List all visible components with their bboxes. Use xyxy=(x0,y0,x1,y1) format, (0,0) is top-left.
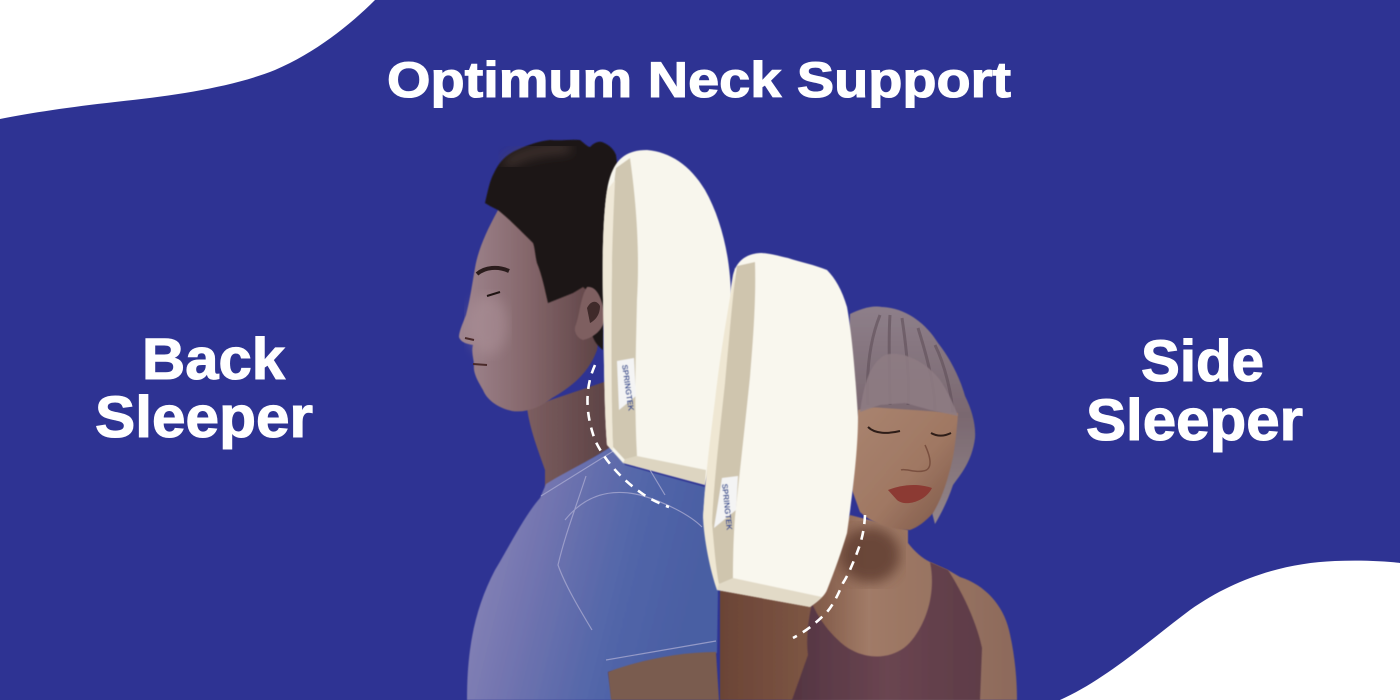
pillow front edge xyxy=(603,180,615,450)
pillow: side sleeper xyxy=(703,253,858,607)
man arm xyxy=(608,652,719,700)
man neck xyxy=(527,380,615,487)
label: side sleeper: Sleeper xyxy=(1086,388,1303,453)
pillow front edge xyxy=(703,267,735,590)
title: Optimum Neck Support xyxy=(387,52,1011,108)
white corner shape: bottom right xyxy=(1060,561,1400,700)
man eye xyxy=(487,292,500,296)
white corner shape: top left xyxy=(0,0,375,119)
label: side sleeper xyxy=(1086,329,1303,453)
woman lips xyxy=(888,485,932,503)
pillow: back sleeper xyxy=(603,150,731,485)
man hair highlight xyxy=(505,148,570,165)
pillow bottom seam xyxy=(623,456,706,485)
dashed curve: side sleeper neck xyxy=(793,515,865,638)
man face highlight xyxy=(468,295,508,355)
man nostril and lips xyxy=(465,338,487,365)
label: back sleeper: Back xyxy=(142,327,286,392)
man shirt xyxy=(467,444,718,700)
man face xyxy=(459,210,605,411)
man ear xyxy=(575,287,605,340)
pillow label: SPRINGTEK xyxy=(720,483,734,531)
label: side sleeper: Side xyxy=(1141,329,1264,394)
woman face xyxy=(852,407,958,530)
pillow label xyxy=(714,476,738,531)
pillow body xyxy=(703,253,858,607)
woman neck shadow xyxy=(840,527,900,583)
pillow side mesh xyxy=(611,158,638,460)
man hair xyxy=(485,140,618,350)
pillow side mesh xyxy=(712,262,755,584)
man figure xyxy=(459,140,719,700)
label: back sleeper: Sleeper xyxy=(95,385,313,450)
dashed curve: back sleeper neck xyxy=(587,365,669,507)
man ear shadow xyxy=(587,302,600,323)
woman fringe xyxy=(860,354,958,416)
pillow label: SPRINGTEK xyxy=(620,364,635,412)
man eyebrow xyxy=(477,268,509,274)
woman eyes xyxy=(868,427,951,436)
label: back sleeper xyxy=(95,327,313,450)
woman body skin xyxy=(720,515,1017,700)
woman figure xyxy=(720,306,1017,700)
man shirt seams xyxy=(541,450,716,660)
pillow body xyxy=(603,150,731,485)
woman hair strands xyxy=(868,315,953,415)
woman nose xyxy=(901,445,930,471)
pillow bottom seam xyxy=(717,578,822,607)
woman tank top xyxy=(792,562,982,700)
woman hair xyxy=(845,306,975,524)
